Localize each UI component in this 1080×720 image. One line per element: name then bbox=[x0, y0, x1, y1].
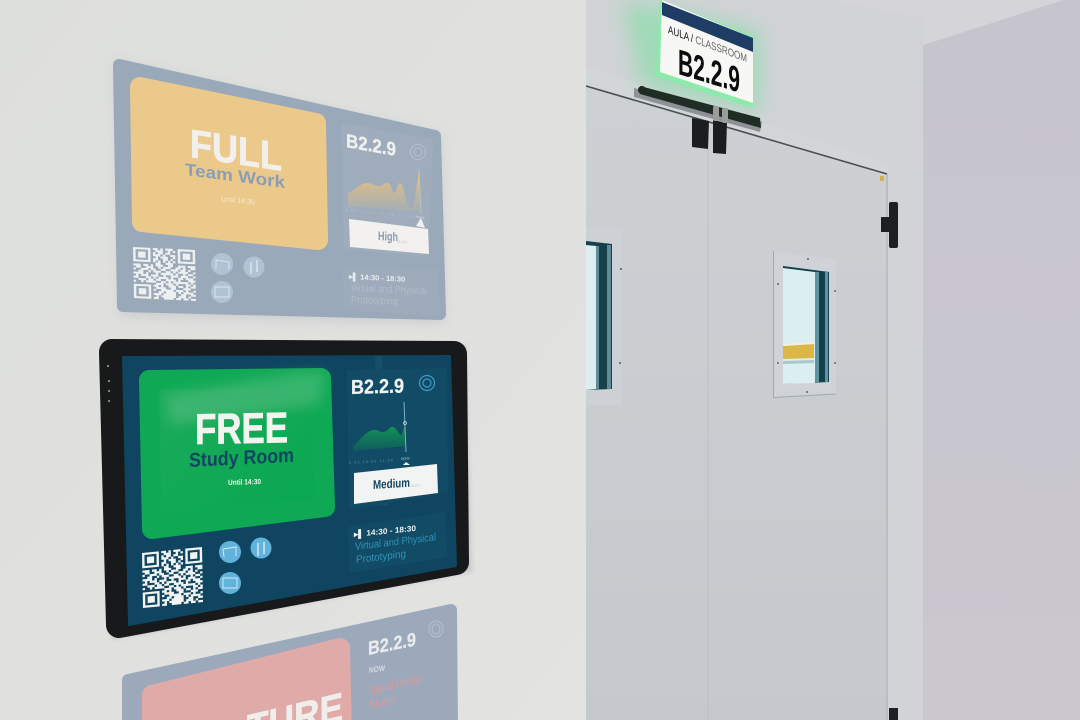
side card bbox=[347, 368, 448, 510]
room number: B2.2.9 bbox=[351, 375, 404, 399]
icon: amenity screen bbox=[211, 281, 233, 303]
tablet bezel bbox=[112, 352, 456, 625]
reflection on screen bbox=[375, 356, 388, 505]
sign room number: B2.2.9 bbox=[678, 42, 740, 100]
sign white face bbox=[660, 0, 753, 103]
level box: BUSY bbox=[398, 240, 408, 245]
level box bbox=[354, 462, 438, 504]
screen bbox=[123, 356, 456, 625]
status card orange bbox=[140, 87, 318, 240]
busy chart bbox=[345, 168, 425, 220]
until time: Until 14:30 bbox=[228, 477, 261, 487]
level box: High bbox=[378, 229, 398, 244]
panel shadow bbox=[116, 62, 445, 323]
window: left door window bbox=[586, 226, 622, 405]
ceiling: right corner bbox=[835, 0, 1063, 45]
side card bbox=[344, 126, 430, 254]
wall: left white wall bbox=[0, 0, 587, 720]
schedule card bbox=[350, 515, 445, 570]
status card red bbox=[152, 648, 342, 720]
session name second line: Studio bbox=[369, 692, 396, 712]
room type: Study Room bbox=[189, 445, 294, 472]
schedule card: Prototyping bbox=[351, 295, 398, 307]
busy chart bbox=[349, 402, 410, 465]
panel: FULL status mockup bbox=[116, 62, 445, 323]
wall: back wall around door bbox=[586, 0, 923, 720]
schedule card: ▸▌ 14:30 - 18:30 bbox=[353, 523, 417, 540]
icon: amenity screen bbox=[219, 572, 241, 594]
QR code bbox=[142, 547, 203, 608]
reflection on green card bbox=[165, 372, 326, 425]
status card green bbox=[149, 378, 325, 529]
level box bbox=[349, 218, 429, 254]
level box: BUSY bbox=[411, 483, 421, 488]
hinge: upper right door hinge bbox=[881, 202, 898, 248]
status word: FREE bbox=[195, 404, 288, 454]
window: right door window with shelf bbox=[773, 251, 836, 398]
status word: FULL bbox=[190, 121, 282, 180]
room number: B2.2.9 bbox=[346, 131, 396, 161]
door: double door leaves bbox=[586, 86, 887, 720]
icon: globe badge bbox=[420, 376, 434, 390]
busy chart: NOW bbox=[416, 215, 425, 220]
busy chart: 9:00 10:00 11:00 bbox=[349, 458, 393, 465]
icon: amenity table bbox=[211, 253, 233, 275]
session name: Digital Design bbox=[369, 670, 423, 698]
wall: right room wall bbox=[923, 0, 1080, 720]
icon: globe badge bbox=[410, 144, 426, 160]
room number: B2.2.9 bbox=[368, 630, 416, 660]
edge: door frame band bbox=[586, 67, 888, 720]
door closer hardware bbox=[634, 86, 762, 154]
icon: amenity table bbox=[219, 541, 241, 563]
schedule card: Virtual and Physical bbox=[355, 531, 436, 553]
icon: amenity cables bbox=[250, 538, 272, 558]
schedule card: ▸▌ 14:30 - 18:30 bbox=[348, 272, 405, 285]
sign green light bar bbox=[656, 0, 753, 108]
tablet shadow bbox=[106, 345, 472, 640]
schedule card: Prototyping bbox=[356, 548, 406, 566]
busy chart: NOW bbox=[401, 456, 410, 461]
busy chart: 9:00 10:00 11:00 12:00 bbox=[345, 208, 413, 219]
panel body bbox=[128, 610, 452, 720]
tablet side buttons bbox=[107, 365, 110, 402]
sign: illuminated classroom door sign bbox=[622, 0, 760, 112]
level box: Medium bbox=[373, 476, 410, 492]
now label: NOW bbox=[369, 664, 385, 675]
hinge: lower right door hinge bbox=[889, 708, 898, 720]
icon: amenity cables bbox=[244, 256, 264, 278]
schedule card bbox=[345, 270, 438, 313]
schedule card: Virtual and Physical bbox=[351, 283, 427, 297]
icon: globe badge bbox=[429, 621, 443, 637]
panel: reserved status mockup, cropped at bottom bbox=[128, 610, 452, 720]
sign navy band bbox=[662, 2, 753, 52]
QR code bbox=[133, 247, 196, 301]
panel body bbox=[119, 65, 440, 314]
until time: Until 14:30 bbox=[221, 196, 255, 206]
sign glow bbox=[622, 0, 760, 112]
room type: Team Work bbox=[185, 160, 286, 192]
tablet: wall mounted room display bbox=[106, 345, 472, 640]
sign heading: AULA / CLASSROOM bbox=[668, 24, 747, 65]
